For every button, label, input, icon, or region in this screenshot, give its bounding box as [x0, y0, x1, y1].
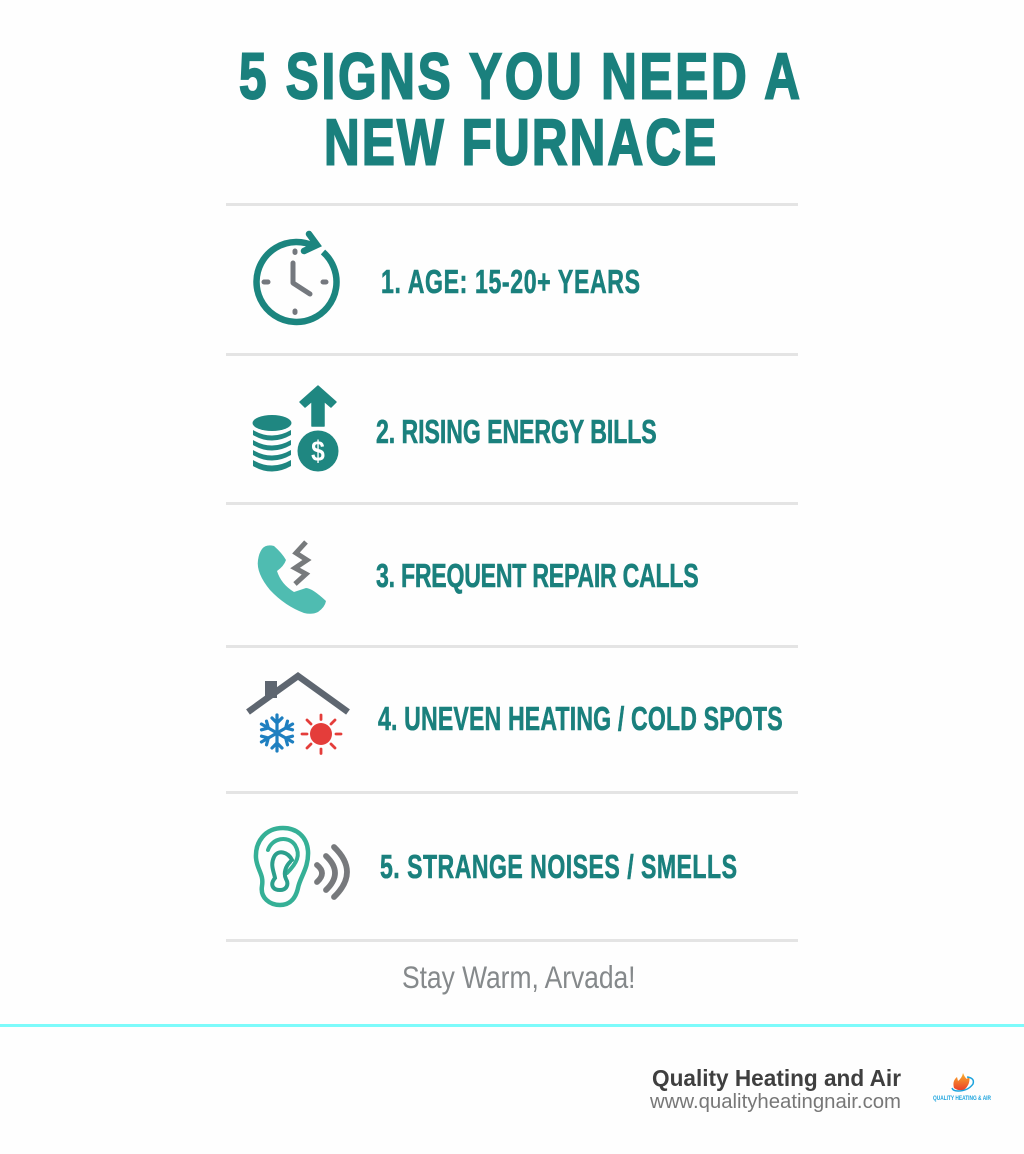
- icon: phone with crack: [258, 542, 326, 614]
- title: 5 SIGNS YOU NEED A: [239, 41, 800, 113]
- title: NEW FURNACE: [324, 107, 716, 179]
- tagline: Stay Warm, Arvada!: [402, 961, 636, 996]
- icon: house with cold and heat: [248, 676, 348, 754]
- icon: clock with arrow: [257, 234, 337, 322]
- footer company name: Quality Heating and Air: [652, 1065, 901, 1091]
- icon: coins and rising dollar: [252, 386, 338, 472]
- title: [239, 41, 800, 179]
- heading: sign 1: 1. AGE: 15-20+ YEARS: [381, 264, 640, 301]
- footer website: www.qualityheatingnair.com: [649, 1091, 901, 1113]
- heading: sign 5: 5. STRANGE NOISES / SMELLS: [380, 849, 737, 886]
- heading: sign 3: 3. FREQUENT REPAIR CALLS: [376, 558, 699, 595]
- heading: sign 2: 2. RISING ENERGY BILLS: [376, 414, 657, 451]
- icon: ear with sound waves: [256, 828, 347, 905]
- logo: QUALITY HEATING & AIR: [933, 1096, 992, 1102]
- icon: coins and rising dollar: $: [311, 435, 325, 467]
- logo: [933, 1073, 992, 1102]
- heading: sign 4: 4. UNEVEN HEATING / COLD SPOTS: [378, 701, 783, 738]
